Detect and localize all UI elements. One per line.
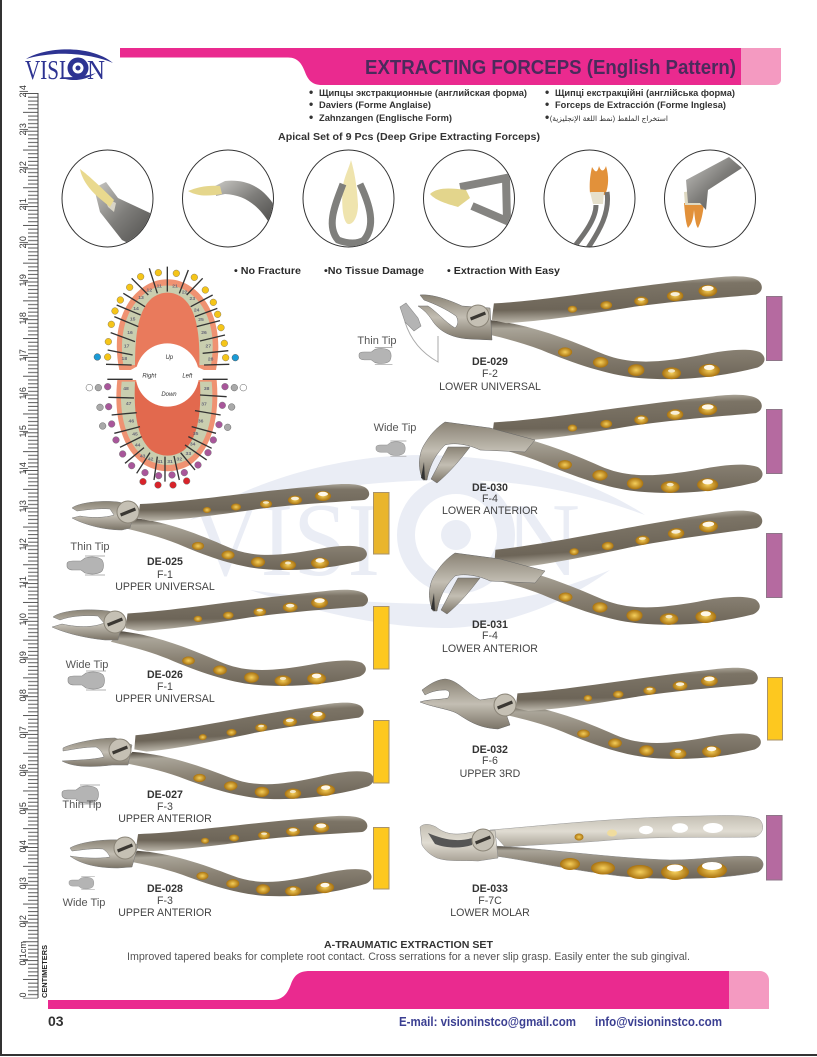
tooth numbers: 45	[132, 432, 138, 438]
upper arch	[117, 279, 218, 370]
multi-language names: •	[545, 110, 549, 124]
multi-language names: •	[545, 85, 549, 99]
forceps DE-030	[419, 394, 763, 493]
tooth numbers: 43	[140, 453, 146, 459]
thin tip note	[62, 785, 102, 811]
color bar DE-032	[768, 678, 782, 740]
label DE-029: DE-029	[472, 356, 508, 368]
ruler: centimeters: 2|3	[18, 123, 28, 136]
tooth numbers: 16	[127, 330, 133, 336]
tooth numbers: 13	[138, 295, 144, 301]
ruler: centimeters: 0|8	[18, 689, 28, 702]
label DE-027: DE-027	[147, 789, 183, 801]
title: EXTRACTING FORCEPS (English Pattern)	[365, 57, 736, 79]
multi-language names: Zahnzangen (Englische Form)	[319, 113, 452, 123]
multi-language names: •	[309, 110, 313, 124]
features list: • Extraction With Easy	[447, 265, 560, 277]
label DE-030	[442, 482, 538, 517]
ruler: centimeters: 2|0	[18, 236, 28, 248]
forceps DE-033	[420, 815, 763, 880]
watermark: VISION eye: VISI	[190, 481, 380, 598]
ruler: centimeters: 1|4	[18, 462, 28, 474]
footer description: A-TRAUMATIC EXTRACTION SET	[324, 939, 494, 951]
divider lines	[106, 267, 229, 482]
ruler: centimeters: 2|4	[18, 85, 28, 98]
label DE-031: F-4	[482, 630, 498, 642]
ruler: centimeters: 0|1cm	[18, 941, 28, 966]
watermark: VISION eye	[190, 455, 645, 628]
detail circle 1	[62, 150, 153, 247]
tooth numbers: 26	[201, 330, 207, 336]
ruler: centimeters: 1|6	[18, 387, 28, 400]
label DE-025: DE-025	[147, 556, 183, 568]
features list	[234, 265, 560, 277]
ruler: centimeters	[18, 85, 49, 998]
thin tip note: Thin Tip	[70, 541, 110, 553]
direction labels: Down	[161, 392, 177, 398]
tooth numbers: 41	[157, 459, 163, 465]
forceps DE-032	[420, 667, 761, 759]
label DE-026: F-1	[157, 681, 173, 693]
label DE-025: UPPER UNIVERSAL	[115, 581, 215, 593]
label DE-030: LOWER ANTERIOR	[442, 505, 538, 517]
ruler: centimeters: 0|9	[18, 651, 28, 664]
tooth numbers: 18	[122, 356, 127, 362]
multi-language names: •	[309, 97, 313, 111]
thin tip note with beak sketch: Thin Tip	[357, 335, 397, 347]
tooth numbers: 44	[135, 443, 141, 449]
tooth numbers: 38	[204, 386, 210, 392]
tooth numbers: 42	[148, 457, 154, 463]
ruler: centimeters: 1|9	[18, 274, 28, 286]
tooth numbers: 25	[198, 317, 204, 323]
multi-language names: Щипці екстракційні (англійська форма)	[555, 88, 735, 98]
label DE-032: UPPER 3RD	[460, 768, 521, 780]
set heading: Apical Set of 9 Pcs (Deep Gripe Extracting Forceps)	[278, 131, 540, 143]
multi-language names	[309, 85, 735, 124]
logo: VISION eye: VISI	[25, 55, 66, 85]
tooth numbers: 36	[198, 418, 204, 424]
multi-language names: Forceps de Extracción (Forme Inglesa)	[555, 100, 726, 110]
ruler: centimeters: 0|2	[18, 915, 28, 928]
tooth numbers: 28	[208, 357, 214, 363]
label DE-028: F-3	[157, 895, 173, 907]
label DE-032	[460, 744, 521, 780]
tooth numbers: 14	[133, 306, 139, 312]
direction labels: Up	[165, 355, 174, 361]
detail circle 4	[424, 150, 514, 247]
multi-language names: •	[545, 97, 549, 111]
multi-language names: Daviers (Forme Anglaise)	[319, 100, 431, 110]
thin tip note	[67, 541, 110, 575]
contact details	[399, 1014, 722, 1029]
direction labels: Right	[142, 373, 157, 379]
logo: VISION eye: N	[87, 55, 105, 85]
multi-language names: Щипцы экстракционные (английская форма)	[319, 88, 527, 98]
footer banner	[48, 971, 769, 1009]
tooth numbers: 33	[186, 451, 191, 457]
detail circle 6	[664, 150, 756, 247]
color bar DE-027	[374, 720, 389, 783]
color bar DE-026	[374, 606, 389, 669]
ruler: centimeters: 2|1	[18, 198, 28, 210]
contact details: E-mail: visioninstco@gmail.com	[399, 1014, 576, 1029]
tooth numbers	[122, 284, 214, 465]
white markers	[86, 384, 247, 391]
label DE-027: F-3	[157, 801, 173, 813]
contact details: info@visioninstco.com	[595, 1014, 722, 1029]
tooth numbers: 15	[130, 317, 136, 323]
features list: •No Tissue Damage	[324, 265, 424, 277]
tooth numbers: 17	[124, 343, 130, 349]
tooth numbers: 21	[172, 284, 178, 290]
tooth numbers: 27	[206, 344, 211, 350]
wide tip note	[66, 659, 108, 690]
ruler: centimeters: 1|2	[18, 538, 28, 550]
color bar DE-030	[766, 410, 782, 474]
ruler: centimeters: 1|8	[18, 312, 28, 324]
ruler: centimeters: 0|3	[18, 877, 28, 890]
ruler: centimeters: 0|6	[18, 764, 28, 776]
direction labels: Left	[182, 373, 193, 379]
forceps DE-025	[72, 484, 369, 570]
wide tip note: Wide Tip	[66, 659, 108, 671]
label DE-031	[442, 619, 538, 655]
yellow markers	[104, 269, 229, 361]
wide tip note: Wide Tip	[374, 422, 416, 434]
label DE-031: DE-031	[472, 619, 508, 631]
detail circle 3	[303, 150, 394, 247]
forceps DE-028	[70, 814, 372, 903]
label DE-025	[115, 556, 215, 593]
wide tip note	[63, 877, 105, 909]
ruler: centimeters: CENTIMETERS	[42, 945, 49, 998]
tooth numbers: 12	[147, 288, 152, 294]
color bar DE-031	[766, 534, 782, 598]
page number: 03	[48, 1013, 64, 1029]
forceps DE-029	[418, 276, 765, 382]
label DE-028: DE-028	[147, 883, 183, 895]
label DE-028: UPPER ANTERIOR	[118, 907, 212, 919]
ruler: centimeters: 1|7	[18, 349, 28, 362]
tooth numbers: 34	[190, 442, 196, 448]
label DE-030: DE-030	[472, 482, 508, 494]
label DE-030: F-4	[482, 493, 498, 505]
thin tip note: Thin Tip	[62, 799, 102, 811]
color bar DE-028	[374, 828, 389, 889]
color bar DE-033	[766, 816, 782, 880]
label DE-026	[115, 669, 215, 705]
label DE-029: F-2	[482, 368, 498, 380]
ruler: centimeters: 1|5	[18, 425, 28, 438]
tooth numbers: 22	[182, 289, 188, 295]
footer description: Improved tapered beaks for complete root contact. Cross serrations for a never slip grasp. Easily enter the sub gingival.	[127, 951, 690, 963]
label DE-027: UPPER ANTERIOR	[118, 813, 212, 825]
logo: VISION eye	[25, 49, 113, 85]
tooth numbers: 23	[190, 296, 195, 302]
wide tip note	[374, 422, 416, 456]
footer description	[127, 939, 690, 963]
label DE-026: DE-026	[147, 669, 183, 681]
label DE-032: F-6	[482, 755, 498, 767]
ruler: centimeters: 1|3	[18, 500, 28, 512]
color bar DE-029	[766, 296, 782, 360]
label DE-025: F-1	[157, 569, 173, 581]
blue markers	[94, 354, 239, 361]
label DE-029: LOWER UNIVERSAL	[439, 381, 541, 393]
red markers	[140, 478, 190, 488]
ruler: centimeters: 0|7	[18, 726, 28, 738]
label DE-026: UPPER UNIVERSAL	[115, 693, 215, 705]
tooth numbers: 46	[129, 419, 134, 425]
ruler: centimeters: 0|5	[18, 802, 28, 814]
watermark: VISION eye: N	[505, 481, 580, 598]
label DE-027	[118, 789, 212, 825]
label DE-033: F-7C	[478, 895, 502, 907]
multi-language names: استخراج الملقط (نمط اللغة الإنجليزية)	[550, 114, 668, 123]
label DE-033: LOWER MOLAR	[450, 907, 530, 919]
tooth numbers: 48	[123, 386, 129, 392]
multi-language names: •	[309, 85, 313, 99]
features list: • No Fracture	[234, 265, 301, 277]
tooth numbers: 32	[177, 457, 182, 463]
center circle	[136, 343, 199, 407]
ruler: centimeters: 0|4	[18, 840, 28, 852]
header banner	[120, 48, 781, 85]
wide tip note: Wide Tip	[63, 897, 105, 909]
tooth numbers: 11	[157, 284, 162, 290]
ruler: centimeters: 1|1	[18, 576, 28, 588]
tooth numbers: 31	[167, 459, 173, 465]
label DE-032: DE-032	[472, 744, 508, 756]
forceps DE-026	[52, 590, 368, 686]
thin tip note with beak sketch	[357, 303, 438, 364]
detail circle 5	[544, 150, 635, 248]
direction labels	[142, 355, 193, 398]
forceps DE-031	[429, 509, 764, 625]
tooth numbers: 37	[201, 401, 207, 407]
tooth numbers: 47	[126, 401, 132, 407]
label DE-031: LOWER ANTERIOR	[442, 643, 538, 655]
grey markers	[95, 384, 238, 431]
color bar DE-025	[374, 492, 389, 554]
purple markers	[104, 383, 228, 479]
tooth chart	[86, 267, 247, 488]
ruler: centimeters: 1|0	[18, 613, 28, 626]
forceps DE-027	[62, 701, 374, 806]
lower arch	[116, 380, 217, 471]
ruler: centimeters: 2|2	[18, 161, 28, 174]
label DE-033	[450, 883, 530, 919]
tooth numbers: 35	[193, 431, 199, 437]
label DE-033: DE-033	[472, 883, 508, 895]
label DE-028	[118, 883, 212, 919]
label DE-029	[439, 356, 541, 393]
ruler: centimeters: 0	[18, 992, 28, 998]
tooth numbers: 24	[194, 308, 200, 314]
detail circle 2	[182, 150, 274, 247]
